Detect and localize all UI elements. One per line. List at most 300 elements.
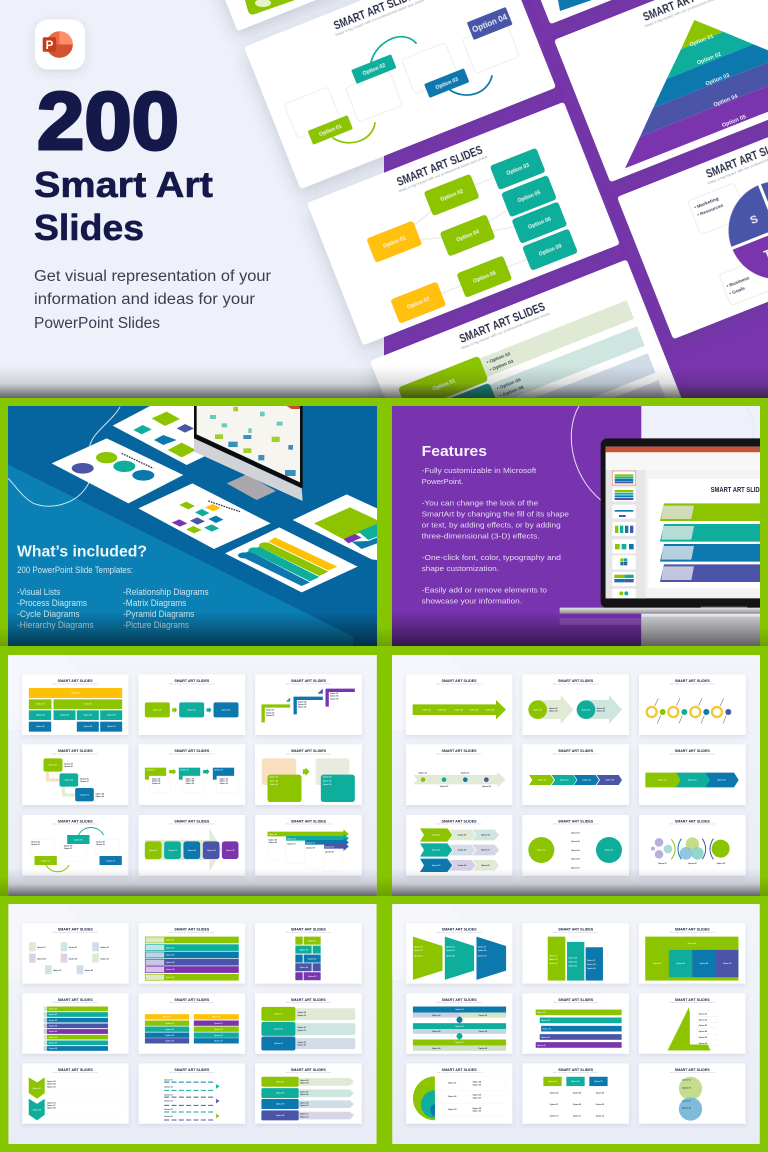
slide: long arrow: SMART ART SLIDES xyxy=(442,679,477,683)
slide: layered bars: Option 07 xyxy=(455,1041,464,1044)
slide: two tables: Option 06 xyxy=(212,1016,220,1019)
slide: half circles: Option 02 xyxy=(448,1095,456,1098)
slide: stacked arrows: Option 06 xyxy=(268,841,277,844)
hero section xyxy=(0,0,768,399)
list: diagram types right xyxy=(123,587,209,630)
panel: process slides right xyxy=(392,655,760,896)
slide: cycle diagram xyxy=(244,0,556,189)
slide: half circles: Option 04 xyxy=(472,1081,481,1084)
slide: half circles: Option 08 xyxy=(472,1107,481,1110)
slide: green pyramid: Option 04 xyxy=(699,1030,707,1033)
option 01 box: Option 01 xyxy=(432,378,457,393)
slide: stacked arrows: Option 02 xyxy=(287,837,296,840)
slide: offset bars: Make a big impact with our professional slides and charts xyxy=(553,1001,598,1004)
slide: pentagon row: SMART ART SLIDES xyxy=(675,749,710,753)
slide: brick list: SMART ART SLIDES xyxy=(291,928,326,932)
outline boxes xyxy=(284,17,520,146)
list: diagram types left: -Visual Lists xyxy=(17,587,61,597)
slide: two tables: Option 04 xyxy=(165,1034,174,1037)
slide: half circles: Option 05 xyxy=(472,1083,481,1086)
icon: PowerPoint logo: P xyxy=(46,40,54,52)
slide: two circles list: Make a big impact with our professional slides and charts xyxy=(553,823,598,826)
slide: eight bars: Make a big impact with our professional slides and charts xyxy=(53,1001,98,1004)
slide: eight bars: Option 01 xyxy=(49,1008,57,1011)
slide: funnels: Option 09 xyxy=(478,954,486,957)
slide: bars with arrows: Option 04 xyxy=(276,1114,284,1117)
bullet text xyxy=(693,195,756,297)
slide: steps: Make a big impact with our professional slides and charts xyxy=(286,682,331,685)
features text xyxy=(422,466,569,606)
slide: arrow process: Option 01 xyxy=(149,849,157,852)
slide: hierarchy blocks: Option 05 xyxy=(60,714,69,717)
slide: steps xyxy=(255,674,362,735)
slide: process with boxes: Option 12 xyxy=(219,782,228,785)
slide: steps: Option 02 xyxy=(266,711,274,714)
slide: bubble groups: Option 03 xyxy=(716,862,725,865)
slide: chevron grid: Make a big impact with our professional slides and charts xyxy=(436,823,482,826)
slide: column bars: Option 04 xyxy=(568,957,577,960)
slide: bars with arrows: Make a big impact with our professional slides and charts xyxy=(286,1071,331,1074)
slide: matrix blocks xyxy=(639,923,745,984)
slide: half circles: SMART ART SLIDES xyxy=(442,1068,477,1072)
heading: features: Features xyxy=(422,444,487,460)
slide: hierarchy blocks: Option 08 xyxy=(36,725,44,728)
slide: timeline arrow: SMART ART SLIDES xyxy=(442,749,477,753)
slide: steps: Option 01 xyxy=(266,709,274,712)
slide: two step cards: SMART ART SLIDES xyxy=(291,749,326,753)
features text: SmartArt by changing the fill of its shape xyxy=(422,510,569,519)
slide: three cards with bars: Option 02 xyxy=(274,1027,283,1030)
slide: three column table: Option 01 xyxy=(548,1080,557,1083)
slide: three cards with bars: Option 09 xyxy=(297,1043,306,1046)
hierarchy boxes: Option 07 xyxy=(406,296,431,311)
slide: chevron row: Option 02 xyxy=(560,779,569,782)
slide: stacked arrows: Option 07 xyxy=(287,842,296,845)
slide: pentagon row xyxy=(639,744,746,805)
slide: steps: SMART ART SLIDES xyxy=(291,679,326,683)
slide: three column table: Option 11 xyxy=(573,1115,581,1118)
slide: process with boxes: Option 06 xyxy=(152,782,160,785)
slide: cycle: Option 02 xyxy=(41,859,50,862)
slide: green pyramid: SMART ART SLIDES xyxy=(675,998,710,1002)
option 02: Option 02 xyxy=(362,63,387,77)
slide: two step cards: Make a big impact with our professional slides and charts xyxy=(286,752,331,755)
slide: long arrow: Make a big impact with our professional slides and charts xyxy=(436,682,482,685)
slide: circle arrows xyxy=(522,674,629,735)
slide: layered bars: Option 05 xyxy=(432,1030,440,1033)
slide: picture list: Option 08 xyxy=(85,969,93,972)
slide: dashed timelines: Option 03 xyxy=(164,1093,173,1096)
slide: bars with arrows: Option 01 xyxy=(276,1080,284,1083)
slide: timeline arrow: Option 03 xyxy=(461,772,469,775)
slide: three step process: Make a big impact with our professional slides and charts xyxy=(169,682,215,685)
slide: column bars: Option 06 xyxy=(568,965,577,968)
isometric slide: treemap xyxy=(293,494,377,560)
slide: eight bars: SMART ART SLIDES xyxy=(58,998,93,1002)
slide: cycle xyxy=(22,815,129,876)
slide: down chevrons: Option 03 xyxy=(47,1080,55,1083)
slide: green pyramid: Option 01 xyxy=(699,1013,707,1016)
slide: half circles: Option 07 xyxy=(472,1096,481,1099)
main slide xyxy=(648,479,767,588)
slide: arrow process: Option 04 xyxy=(207,849,215,852)
slide: chevron grid: Option 02 xyxy=(432,849,440,852)
bullet text: • Business xyxy=(726,275,751,290)
slide: two tables: Option 09 xyxy=(214,1034,223,1037)
slide: steps: Option 06 xyxy=(298,706,306,709)
description text: information and ideas for your xyxy=(34,291,255,308)
slide: bars with arrows: SMART ART SLIDES xyxy=(291,1068,326,1072)
option 01 box xyxy=(398,356,489,413)
list: diagram types right: -Relationship Diagrams xyxy=(123,587,209,597)
slide: process with boxes: Option 04 xyxy=(152,777,160,780)
slide: three column table: Option 03 xyxy=(594,1080,603,1083)
slide: process with boxes xyxy=(138,744,245,805)
slide: two tables: Option 10 xyxy=(214,1039,223,1042)
option 03: Option 03 xyxy=(435,77,459,91)
pyramid chart: Option 05 xyxy=(721,114,747,129)
slide: six bars: Option 06 xyxy=(166,976,174,979)
slide: cycle: Option 03 xyxy=(106,859,115,862)
slide: pentagon row: Option 03 xyxy=(717,779,726,782)
slide: six bars: Option 05 xyxy=(166,968,174,971)
slide: arrow process: Option 03 xyxy=(188,849,196,852)
slide: three step process: Option 02 xyxy=(187,709,196,712)
slide: cycle: Option 05 xyxy=(31,843,40,846)
slide: dashed timelines: Option 06 xyxy=(164,1115,173,1118)
slide: three column table: Make a big impact with our professional slides and charts xyxy=(553,1071,598,1074)
slide: staircase process: SMART ART SLIDES xyxy=(58,749,93,753)
slide: cycle: Make a big impact with our professional slides and charts xyxy=(53,823,98,826)
slide: three cards with bars: Option 07 xyxy=(297,1029,306,1032)
slide: half circles xyxy=(406,1063,512,1124)
slide: stacked arrows: Option 03 xyxy=(306,841,315,844)
features text: -Easily add or remove elements to xyxy=(422,586,547,595)
slide: brick list: Option 04 xyxy=(299,966,308,969)
slide: six bars: Option 02 xyxy=(166,946,174,949)
slide: column bars: Option 01 xyxy=(549,954,557,957)
slide: down chevrons: Option 04 xyxy=(47,1083,55,1086)
option 02 xyxy=(351,54,397,84)
features text: shape customization. xyxy=(422,564,499,573)
hierarchy boxes: Option 05 xyxy=(517,190,542,204)
slide: three cards with bars: Option 05 xyxy=(297,1014,306,1017)
hierarchy boxes: Option 06 xyxy=(528,216,552,231)
slide: offset bars: Option 03 xyxy=(542,1027,551,1030)
slide: six bars: Option 03 xyxy=(166,954,174,957)
slide: process with boxes: Make a big impact with our professional slides and charts xyxy=(169,752,215,755)
slide: column bars: Option 08 xyxy=(587,963,595,966)
slide: chevron grid: Option 01 xyxy=(432,834,440,837)
slide: process with boxes: Option 03 xyxy=(214,769,223,772)
slide: steps: Option 03 xyxy=(266,714,274,717)
slide thumbnails xyxy=(612,471,636,598)
slide: bars with arrows: Option 12 xyxy=(300,1115,308,1118)
slide: process with boxes: Option 02 xyxy=(180,769,189,772)
slide: bars with arrows: Option 05 xyxy=(300,1079,308,1082)
slide: stacked circles: SMART ART SLIDES xyxy=(675,1068,710,1072)
slide: timeline arrow: Option 04 xyxy=(482,785,491,788)
slide: down chevrons: Option 07 xyxy=(47,1104,55,1107)
slide: two circles list xyxy=(522,815,629,876)
slide: funnels: Option 06 xyxy=(446,954,455,957)
slide: two circles list: SMART ART SLIDES xyxy=(558,819,594,823)
slide: three column table: SMART ART SLIDES xyxy=(558,1068,594,1072)
slide: bars list xyxy=(370,259,683,503)
bullet text xyxy=(486,351,525,399)
hierarchy boxes: Option 01 xyxy=(382,235,407,250)
list: diagram types left: -Cycle Diagrams xyxy=(17,609,80,619)
slide: staircase process: Option 04 xyxy=(64,762,73,765)
slide: layered bars: SMART ART SLIDES xyxy=(442,998,477,1002)
slide: bars with arrows: Option 02 xyxy=(276,1092,284,1095)
slide: offset bars: Option 02 xyxy=(541,1019,549,1022)
heading: what's included: What’s included? xyxy=(17,544,147,561)
slide: two tables xyxy=(139,994,245,1054)
slide: chevron grid: Option 09 xyxy=(481,864,490,867)
slide: steps: Option 08 xyxy=(330,695,338,698)
slide: cycle: Option 01 xyxy=(74,838,82,841)
slide: chevron grid: Option 07 xyxy=(481,849,490,852)
isometric slide: stacked bars xyxy=(225,527,358,592)
slide: pentagon row: Option 01 xyxy=(658,779,666,782)
slide: process with boxes: Option 10 xyxy=(219,777,228,780)
slide: offset bars: SMART ART SLIDES xyxy=(558,998,594,1002)
frame shading xyxy=(0,626,768,896)
slide: staircase process: Option 05 xyxy=(64,765,73,768)
slide: hierarchy blocks: Option 01 xyxy=(71,692,80,695)
slide: brick list: Option 05 xyxy=(308,975,316,978)
hierarchy boxes: Option 02 xyxy=(440,189,464,203)
features text: -You can change the look of the xyxy=(422,499,538,508)
slide: bars with arrows: Option 10 xyxy=(300,1104,308,1107)
subtitle: slide subtitle: Make a big impact with our professional slides and charts xyxy=(398,155,488,193)
slide: staircase process: Option 09 xyxy=(96,795,104,798)
slide: brick list: Option 03 xyxy=(308,957,316,960)
slide: ring chain xyxy=(639,674,746,735)
slide: down chevrons xyxy=(22,1063,129,1124)
slide: circle arrows: Option 05 xyxy=(597,707,605,710)
hierarchy boxes xyxy=(358,147,578,324)
slide: circle arrows: Option 03 xyxy=(549,707,557,710)
slide: pentagon row: Make a big impact with our professional slides and charts xyxy=(670,752,715,755)
option 01 xyxy=(308,115,353,145)
bullet text: • Marketing xyxy=(693,196,720,211)
slide: column bars: Make a big impact with our professional slides and charts xyxy=(553,931,598,934)
slide: brick list: Option 02 xyxy=(299,948,308,951)
swot pie: S xyxy=(749,213,760,227)
slide: picture list: SMART ART SLIDES xyxy=(58,928,93,932)
slide: picture list xyxy=(22,923,129,984)
slide: dashed timelines: Option 01 xyxy=(164,1079,173,1082)
slide: matrix blocks: SMART ART SLIDES xyxy=(675,928,710,932)
slide: two circles list: Option 01 xyxy=(537,849,546,852)
slide: two tables: SMART ART SLIDES xyxy=(174,998,210,1002)
slide: half circles: Make a big impact with our professional slides and charts xyxy=(437,1071,482,1074)
slide: chevron grid: SMART ART SLIDES xyxy=(442,819,477,823)
slide: stacked arrows: Make a big impact with our professional slides and charts xyxy=(286,823,331,826)
title: smart art slides: Slides xyxy=(34,207,144,248)
slide: circle arrows: Option 04 xyxy=(549,710,557,713)
slide: circle arrows: Option 01 xyxy=(533,708,542,711)
slide: funnels: Option 02 xyxy=(414,949,423,952)
slide: stacked circles: Option 03 xyxy=(682,1099,691,1102)
slide: circle arrows: Option 02 xyxy=(582,708,590,711)
slide: matrix blocks: Option 03 xyxy=(676,962,685,965)
subtitle: slide subtitle: Make a big impact with our professional slides and charts xyxy=(335,0,425,37)
list: diagram types left: -Hierarchy Diagrams xyxy=(17,620,94,630)
slide: stacked arrows: Option 08 xyxy=(306,847,315,850)
slide: chevron grid: Option 05 xyxy=(481,834,490,837)
decorative curve xyxy=(8,407,120,506)
slide: dashed timelines xyxy=(139,1063,245,1124)
option 03 xyxy=(424,68,469,98)
title: smart art slides: Smart Art xyxy=(34,164,213,205)
slide: layered bars xyxy=(406,994,512,1054)
slide: top left partial xyxy=(181,0,493,31)
slide: long arrow: Option 04 xyxy=(470,708,478,711)
bullet text: • Option 06 xyxy=(499,384,525,399)
slide: matrix blocks: Option 05 xyxy=(723,962,731,965)
slide: process with boxes: Option 01 xyxy=(146,769,155,772)
slide: eight bars: Option 05 xyxy=(49,1030,57,1033)
slide: half circles: Option 03 xyxy=(448,1108,456,1111)
slide: layered bars: Option 09 xyxy=(479,1047,487,1050)
slide: funnels: Option 01 xyxy=(414,946,423,949)
slide: two tables: Option 08 xyxy=(214,1028,223,1031)
slide: funnels: Option 08 xyxy=(478,949,486,952)
slide: two circles list: Option 06 xyxy=(571,858,580,861)
hierarchy boxes: Option 04 xyxy=(456,229,480,244)
slide: three cards with bars: Option 04 xyxy=(297,1011,306,1014)
slide: circle arrows: SMART ART SLIDES xyxy=(558,679,594,683)
slide: green pyramid: Option 02 xyxy=(699,1019,707,1022)
slide: two tables: Make a big impact with our professional slides and charts xyxy=(169,1001,215,1004)
slide: cycle: Option 06 xyxy=(64,845,72,848)
slide: chevron grid: Option 06 xyxy=(458,849,466,852)
slide: three step process xyxy=(138,674,245,735)
slide: hierarchy blocks: Make a big impact with our professional slides and charts xyxy=(53,682,98,685)
slide: bubble groups: Make a big impact with our professional slides and charts xyxy=(670,823,715,826)
title: slide title: SMART ART SLIDES xyxy=(458,301,547,346)
slide: chevron grid: Option 03 xyxy=(432,864,440,867)
slide: funnels: Option 07 xyxy=(478,946,486,949)
slide: green pyramid: Option 06 xyxy=(699,1042,707,1045)
slide: layered bars: Option 02 xyxy=(432,1014,440,1017)
slide: arrow process: SMART ART SLIDES xyxy=(174,819,210,823)
option 04: Option 04 xyxy=(471,12,509,34)
slide: circle arrows: Make a big impact with our professional slides and charts xyxy=(553,682,598,685)
description text: PowerPoint Slides xyxy=(34,315,160,332)
slide: down chevrons: Option 06 xyxy=(47,1101,55,1104)
slide: chevron row: Make a big impact with our professional slides and charts xyxy=(553,752,598,755)
slide: stacked circles xyxy=(639,1063,745,1124)
slide: three cards with bars: Option 06 xyxy=(297,1026,306,1029)
slide: hierarchy blocks: Option 03 xyxy=(84,703,92,706)
slide: six bars: Option 01 xyxy=(166,939,174,942)
slide: hierarchy blocks: Option 06 xyxy=(84,714,92,717)
pyramid chart: Option 02 xyxy=(696,52,722,67)
slide: picture list: Option 01 xyxy=(37,946,45,949)
slide: staircase process: Option 02 xyxy=(65,779,73,782)
slide: matrix blocks: Option 01 xyxy=(688,942,696,945)
slide: eight bars xyxy=(22,994,129,1054)
slide: column bars: Option 09 xyxy=(587,967,595,970)
slide: two step cards: Option 03 xyxy=(270,783,278,786)
slide: green pyramid: Make a big impact with our professional slides and charts xyxy=(670,1001,715,1004)
purple backdrop xyxy=(384,0,768,398)
slide: steps: Option 04 xyxy=(298,700,306,703)
slide: three step process: SMART ART SLIDES xyxy=(174,679,210,683)
slide: green pyramid: Option 03 xyxy=(699,1024,707,1027)
slide: layered bars: Option 04 xyxy=(455,1025,464,1028)
slide: steps: Option 05 xyxy=(298,703,306,706)
slide: hierarchy blocks: SMART ART SLIDES xyxy=(58,679,93,683)
slide: hierarchy diagram xyxy=(307,102,620,345)
slide: two step cards: Option 06 xyxy=(323,783,331,786)
slide: circle arrows: Option 06 xyxy=(597,710,605,713)
slide: process with boxes: Option 05 xyxy=(152,780,160,783)
slide: column bars: Option 07 xyxy=(587,959,595,962)
panel: list slides xyxy=(8,904,377,1144)
slide: six bars xyxy=(139,923,245,984)
slide: bars with arrows: Option 03 xyxy=(276,1103,284,1106)
subtitle: slide subtitle: Make a big impact with our professional slides and charts xyxy=(461,312,551,350)
description text xyxy=(34,268,271,332)
slide: chevron row: SMART ART SLIDES xyxy=(558,749,594,753)
slide: timeline arrow: Option 02 xyxy=(440,785,448,788)
slide: two tables: Option 02 xyxy=(165,1022,174,1025)
slide: ring chain: SMART ART SLIDES xyxy=(675,679,710,683)
decorative arc xyxy=(571,406,601,500)
slide: layered bars: Option 03 xyxy=(479,1014,487,1017)
slide: bars with arrows: Option 11 xyxy=(300,1113,308,1116)
slide: bubble groups: Option 01 xyxy=(658,862,667,865)
slide: three cards with bars: Make a big impact with our professional slides and charts xyxy=(286,1001,331,1004)
slide: offset bars: Option 01 xyxy=(537,1011,545,1014)
slide: hierarchy blocks xyxy=(22,674,129,735)
panel: shape slides xyxy=(392,904,760,1144)
slide: hierarchy blocks: Option 02 xyxy=(36,703,44,706)
slide: chevron row: Option 01 xyxy=(538,779,546,782)
slide: funnels: Make a big impact with our professional slides and charts xyxy=(437,931,482,934)
bullet text: • Option 02 xyxy=(486,351,512,366)
slide: chevron row: Option 04 xyxy=(605,779,614,782)
slide: process with boxes: Option 08 xyxy=(185,780,194,783)
slide: column bars: Option 05 xyxy=(568,961,577,964)
slide: two circles list: Option 07 xyxy=(571,866,580,869)
slide: layered bars: Option 01 xyxy=(455,1008,464,1011)
slide: stacked circles: Option 02 xyxy=(682,1086,691,1089)
slide: three step process: Option 01 xyxy=(153,709,161,712)
slide: green pyramid: Option 05 xyxy=(699,1036,707,1039)
slide: down chevrons: Option 05 xyxy=(47,1085,55,1088)
slide: steps: Option 09 xyxy=(330,697,338,700)
laptop xyxy=(560,438,768,614)
slide: two tables: Option 03 xyxy=(165,1028,174,1031)
hierarchy boxes: Option 09 xyxy=(538,243,563,258)
slide: bars with arrows: Option 09 xyxy=(300,1101,308,1104)
slide: stacked arrows: SMART ART SLIDES xyxy=(291,819,326,823)
slide: three cards with bars: SMART ART SLIDES xyxy=(291,998,326,1002)
slide: eight bars: Option 06 xyxy=(49,1036,57,1039)
slide: three cards with bars xyxy=(255,994,362,1054)
slide: chevron grid: Option 04 xyxy=(458,834,466,837)
light bars xyxy=(480,300,666,458)
slide: six bars: SMART ART SLIDES xyxy=(174,928,210,932)
slide: timeline arrow: Make a big impact with our professional slides and charts xyxy=(436,752,482,755)
connectors xyxy=(386,168,551,303)
